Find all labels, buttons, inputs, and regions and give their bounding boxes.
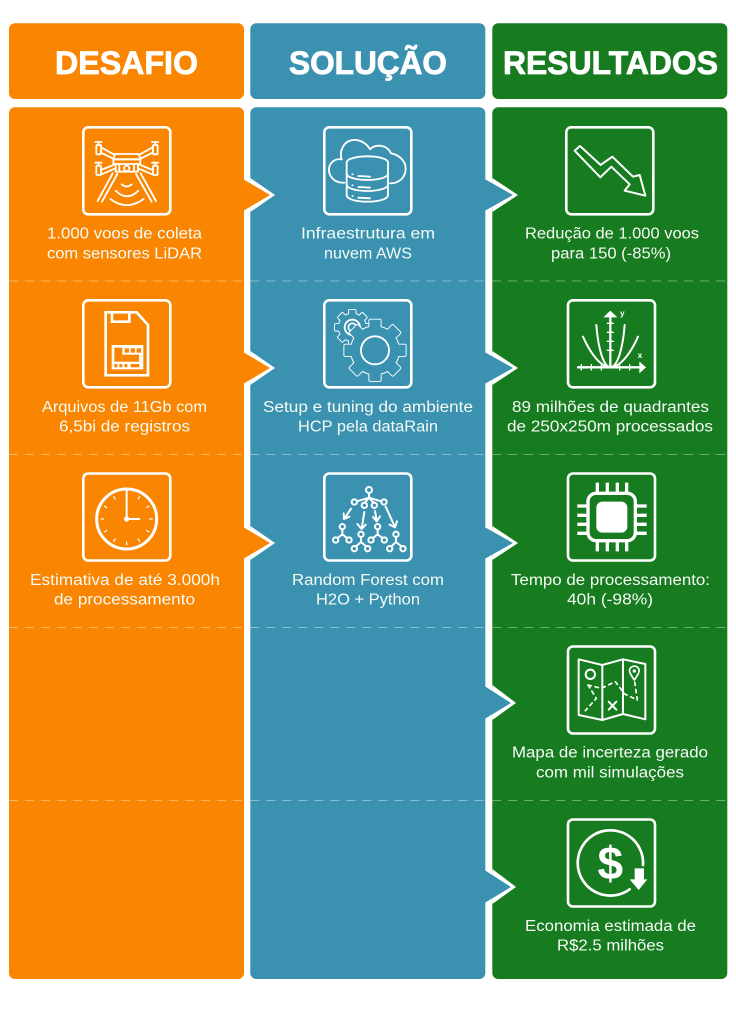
text: arquivos: Arquivos de 11Gb com <box>42 399 207 416</box>
text: infraestrutura: Infraestrutura em <box>301 226 435 242</box>
panel: header resultados <box>492 23 727 99</box>
arrow: solucao to resultados row 5 <box>484 869 516 904</box>
heading: resultados: RESULTADOS <box>503 45 718 81</box>
text: reducao de voos: Redução de 1.000 voos <box>525 226 699 242</box>
icon: cloud database <box>324 127 411 214</box>
text: setup e tuning: HCP pela dataRain <box>298 419 438 436</box>
text: tempo de processamento <box>511 572 710 609</box>
panel: resultados column <box>492 107 727 979</box>
text: economia estimada <box>525 918 696 955</box>
icon: drone <box>83 127 170 214</box>
panel: header desafio <box>9 23 244 99</box>
text: reducao de voos <box>525 226 699 262</box>
text: random forest: H2O + Python <box>316 592 420 609</box>
text: milhoes de quadrantes: de 250x250m processados <box>507 419 713 436</box>
arrow: solucao to resultados row 2 <box>484 351 518 385</box>
text: estimativa <box>30 572 220 609</box>
arrow: solucao to resultados row 4 <box>484 685 516 720</box>
text: infraestrutura: nuvem AWS <box>324 245 412 262</box>
text: setup e tuning: Setup e tuning do ambiente <box>263 399 473 416</box>
heading: solucao: SOLUÇÃO <box>289 45 447 81</box>
text: random forest: Random Forest com <box>292 572 444 589</box>
icon: gears <box>324 300 411 387</box>
arrow: desafio to solucao row 3 <box>243 526 275 560</box>
icon: random forest trees <box>324 474 411 560</box>
arrow: solucao to resultados row 1 <box>484 178 518 212</box>
arrow: desafio to solucao row 1 <box>243 178 275 212</box>
text: arquivos: 6,5bi de registros <box>59 419 190 436</box>
text: economia estimada: Economia estimada de <box>525 918 696 935</box>
text: infraestrutura <box>301 226 435 262</box>
text: mapa de incerteza <box>512 745 708 781</box>
icon: dollar savings <box>568 820 655 906</box>
arrow: desafio to solucao row 2 <box>243 351 275 385</box>
text: reducao de voos: para 150 (-85%) <box>551 245 671 262</box>
text: tempo de processamento: Tempo de processamento: <box>511 572 710 589</box>
text: voos de coleta: com sensores LiDAR <box>47 245 202 262</box>
text: mapa de incerteza: Mapa de incerteza gerado <box>512 745 708 762</box>
text: milhoes de quadrantes <box>507 399 713 436</box>
icon: processor chip <box>568 474 655 560</box>
icon: downward trend <box>566 127 653 214</box>
panel: desafio column <box>9 107 244 979</box>
icon: sim card <box>83 300 170 387</box>
text: random forest <box>292 572 444 609</box>
text: setup e tuning <box>263 399 473 436</box>
text: arquivos <box>42 399 207 436</box>
text: voos de coleta: 1.000 voos de coleta <box>47 226 202 242</box>
text: mapa de incerteza: com mil simulações <box>536 764 684 781</box>
text: milhoes de quadrantes: 89 milhões de quadrantes <box>512 399 709 416</box>
icon: dollar savings: $ <box>598 837 623 889</box>
icon: function graph <box>568 300 655 387</box>
text: estimativa: Estimativa de até 3.000h <box>30 572 220 589</box>
panel: header solucao <box>250 23 485 99</box>
icon: map <box>568 646 655 734</box>
arrow: solucao to resultados row 3 <box>484 526 518 560</box>
text: estimativa: de processamento <box>54 592 195 609</box>
heading: desafio: DESAFIO <box>55 45 198 81</box>
icon: function graph: x <box>638 350 643 360</box>
text: voos de coleta <box>47 226 202 262</box>
panel: solucao column <box>250 107 485 979</box>
icon: clock <box>83 474 170 560</box>
text: tempo de processamento: 40h (-98%) <box>567 592 653 609</box>
text: economia estimada: R$2.5 milhões <box>557 938 664 955</box>
icon: function graph: y <box>620 308 625 318</box>
